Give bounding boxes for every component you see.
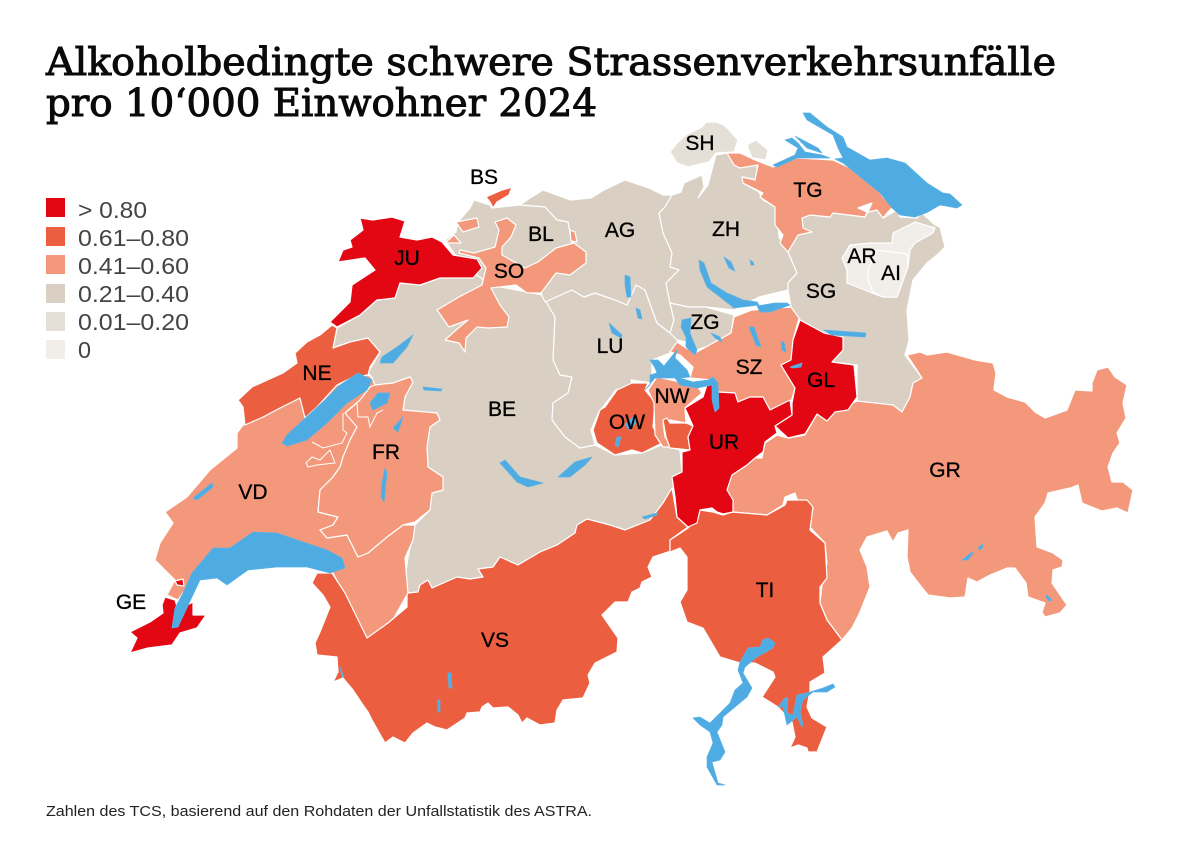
canton labels: BS bbox=[470, 166, 498, 189]
canton AR bbox=[842, 222, 935, 297]
canton OW bbox=[593, 383, 662, 455]
lake: Sempach bbox=[609, 323, 622, 338]
canton NE bbox=[238, 325, 380, 425]
legend item: 0.61-0.80: 0.61–0.80 bbox=[78, 225, 189, 251]
canton AG bbox=[520, 180, 679, 333]
canton SH bbox=[670, 122, 738, 167]
title bbox=[45, 40, 1056, 125]
lake: Constance bbox=[803, 113, 962, 217]
lake: Untersee arm bbox=[795, 136, 822, 153]
lake: Poschiavo bbox=[1046, 595, 1052, 601]
canton labels: AI bbox=[881, 262, 901, 285]
lake: Joux bbox=[193, 483, 213, 500]
lake: Walen bbox=[824, 330, 866, 337]
SO exclave east bbox=[570, 230, 577, 242]
canton labels: AR bbox=[847, 245, 877, 268]
canton labels: JU bbox=[394, 247, 420, 270]
canton AI bbox=[868, 250, 908, 297]
lake: Silvaplana bbox=[978, 544, 983, 550]
canton labels: TG bbox=[793, 179, 823, 202]
legend item: 0.41-0.60: 0.41–0.60 bbox=[78, 253, 189, 279]
canton labels bbox=[116, 132, 961, 652]
lake: Obersee bbox=[757, 303, 790, 312]
canton labels: GL bbox=[807, 369, 835, 392]
canton SO bbox=[437, 218, 586, 352]
lake: Schiffenen bbox=[393, 417, 403, 432]
legend bbox=[46, 197, 189, 363]
lake: Thun bbox=[500, 460, 543, 487]
canton ZH bbox=[659, 153, 797, 310]
lake: Sils bbox=[962, 552, 973, 560]
lake: Sihl bbox=[749, 327, 761, 347]
lake: Lungern bbox=[615, 437, 621, 447]
canton UR bbox=[672, 382, 792, 527]
FR enclaves bbox=[306, 403, 383, 467]
canton labels: FR bbox=[372, 441, 400, 464]
canton labels: GR bbox=[929, 459, 961, 482]
lake: Lucerne bbox=[645, 350, 719, 412]
title: Alkoholbedingte schwere Strassenverkehrsunfälle bbox=[45, 40, 1056, 84]
lake: Lugano bbox=[778, 684, 835, 727]
lakes bbox=[172, 113, 1052, 785]
lake: Emosson bbox=[340, 667, 344, 677]
canton labels: VS bbox=[481, 629, 509, 652]
canton labels: NE bbox=[302, 362, 332, 385]
canton TG bbox=[727, 153, 893, 252]
canton labels: AG bbox=[605, 219, 635, 242]
lake: Pfäffikon bbox=[750, 260, 754, 265]
canton labels: LU bbox=[597, 335, 623, 358]
lake: Dix bbox=[438, 700, 440, 712]
lake: Murten bbox=[370, 393, 390, 410]
lake: Brienz bbox=[558, 457, 592, 477]
lake: Wägi bbox=[781, 342, 786, 352]
lake: Untersee bbox=[773, 138, 830, 167]
canton BL bbox=[445, 200, 572, 285]
canton BE bbox=[333, 275, 682, 593]
canton VS bbox=[312, 488, 688, 743]
lake: Baldegg bbox=[636, 308, 642, 319]
SO exclave west bbox=[445, 235, 461, 243]
canton GL bbox=[775, 320, 857, 438]
canton GE bbox=[130, 597, 206, 653]
lake: Mattmark bbox=[448, 673, 452, 688]
canton labels: BE bbox=[488, 398, 516, 421]
canton LU bbox=[545, 285, 684, 448]
canton FR bbox=[318, 377, 443, 557]
lake: Sarnen bbox=[625, 415, 638, 430]
canton ZG bbox=[670, 303, 734, 350]
legend item: 0: 0 bbox=[78, 337, 91, 363]
lake: Biel bbox=[380, 335, 413, 363]
canton labels: GE bbox=[116, 591, 146, 614]
canton labels: NW bbox=[654, 385, 690, 408]
canton labels: ZG bbox=[690, 311, 720, 334]
legend item: over 0.80 bbox=[46, 197, 147, 223]
canton NW bbox=[648, 377, 702, 447]
lake: Gruyère bbox=[381, 468, 387, 502]
canton labels: OW bbox=[609, 411, 645, 434]
legend item: over 0.80: > 0.80 bbox=[78, 197, 147, 223]
legend item: 0.21-0.40: 0.21–0.40 bbox=[78, 281, 189, 307]
title: pro 10‘000 Einwohner 2024 bbox=[46, 81, 597, 125]
lake: Hallwil bbox=[625, 275, 631, 297]
canton JU bbox=[330, 217, 482, 327]
canton labels: SG bbox=[806, 280, 836, 303]
SO exclave north bbox=[456, 218, 479, 232]
canton labels: VD bbox=[238, 481, 268, 504]
lake: Zürich bbox=[699, 260, 759, 308]
canton labels: UR bbox=[709, 431, 739, 454]
canton SH exclave bbox=[747, 140, 768, 160]
canton labels: SH bbox=[685, 132, 715, 155]
lake: Geneva bbox=[172, 532, 345, 628]
lake: Maggiore bbox=[693, 638, 775, 785]
lake: Neuchâtel bbox=[282, 373, 372, 446]
lake: Klöntal bbox=[790, 363, 802, 368]
canton labels: TI bbox=[756, 579, 774, 602]
canton labels: ZH bbox=[712, 218, 740, 241]
canton TI bbox=[670, 500, 842, 752]
canton labels: BL bbox=[528, 223, 554, 246]
canton BS bbox=[486, 187, 512, 208]
lake: Greifensee bbox=[724, 257, 735, 271]
legend item: 0.01-0.20: 0.01–0.20 bbox=[78, 309, 189, 335]
lake: Oberaar bbox=[642, 513, 657, 519]
canton GR bbox=[727, 352, 1133, 640]
legend item: 0 bbox=[46, 337, 91, 363]
canton SZ bbox=[670, 307, 799, 410]
source note: Zahlen des TCS, basierend auf den Rohdaten der Unfallstatistik des ASTRA. bbox=[46, 803, 592, 820]
canton labels: SZ bbox=[736, 356, 763, 379]
lake: Zug bbox=[681, 318, 697, 355]
OW exclave Engelberg bbox=[663, 418, 693, 450]
canton labels: SO bbox=[494, 260, 524, 283]
small GE enclave Céligny bbox=[175, 579, 184, 586]
map of Switzerland bbox=[116, 113, 1133, 785]
canton SG bbox=[788, 210, 945, 412]
canton VD bbox=[155, 375, 415, 638]
lake: Ägeri bbox=[711, 333, 722, 342]
lake: Wohlen bbox=[423, 387, 442, 391]
